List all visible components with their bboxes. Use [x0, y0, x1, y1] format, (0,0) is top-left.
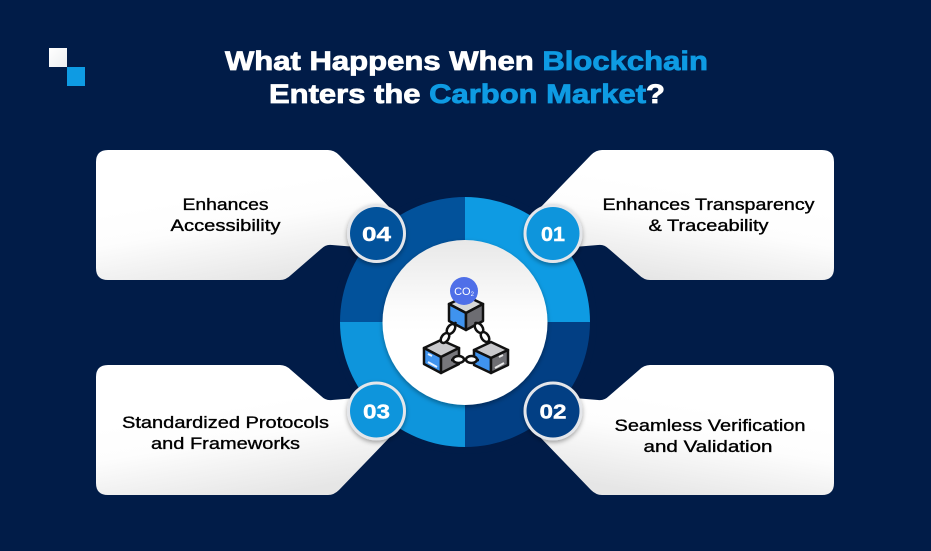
badge 01: 01 [541, 223, 565, 246]
panel: 03 Standardized Protocols and Frameworks [96, 365, 392, 495]
icon: blockchain cubes with CO2 [424, 277, 508, 373]
text: Enhances Transparency & Traceability: & Traceability [648, 217, 769, 235]
text: Standardized Protocols and Frameworks: Standardized Protocols [122, 414, 329, 432]
logo icon: two squares [49, 48, 85, 86]
badge 01 [524, 204, 582, 263]
text: Seamless Verification and Validation [614, 417, 806, 456]
text: Seamless Verification and Validation: and Validation [644, 438, 772, 456]
icon: CO2 bubble [450, 277, 478, 305]
text: Standardized Protocols and Frameworks: and Frameworks [151, 435, 300, 453]
title [225, 46, 708, 109]
title: What Happens When Blockchain [225, 46, 708, 76]
cube: top [449, 296, 483, 330]
badge 02 [524, 382, 582, 440]
center circle [382, 240, 548, 405]
text: Enhances Accessibility: Enhances [182, 196, 268, 214]
title: Enters the Carbon Market ? [269, 79, 665, 109]
badge 04: 04 [362, 223, 392, 246]
panel: 04 Enhances Accessibility [96, 150, 392, 280]
panel: 01 Enhances Transparency & Traceability [538, 150, 834, 280]
text: Enhances Transparency & Traceability [602, 196, 815, 235]
text: Seamless Verification and Validation: Seamless Verification [614, 417, 806, 435]
badge 02: 02 [540, 400, 566, 424]
text: Standardized Protocols and Frameworks [122, 414, 329, 453]
icon: CO2 bubble: CO [454, 286, 471, 298]
badge 03 [347, 382, 406, 440]
badge 04 [347, 204, 406, 263]
text: Enhances Accessibility: Accessibility [170, 217, 281, 235]
panel: 02 Seamless Verification and Validation [538, 365, 834, 495]
cube: right [474, 342, 508, 373]
chain links [439, 321, 491, 363]
text: Enhances Transparency & Traceability: Enhances Transparency [602, 196, 815, 214]
cube: left [424, 340, 459, 373]
ring chart [333, 190, 597, 454]
badge 03: 03 [363, 400, 390, 424]
icon: CO2 bubble: 2 [471, 292, 475, 298]
text: Enhances Accessibility [170, 196, 281, 235]
